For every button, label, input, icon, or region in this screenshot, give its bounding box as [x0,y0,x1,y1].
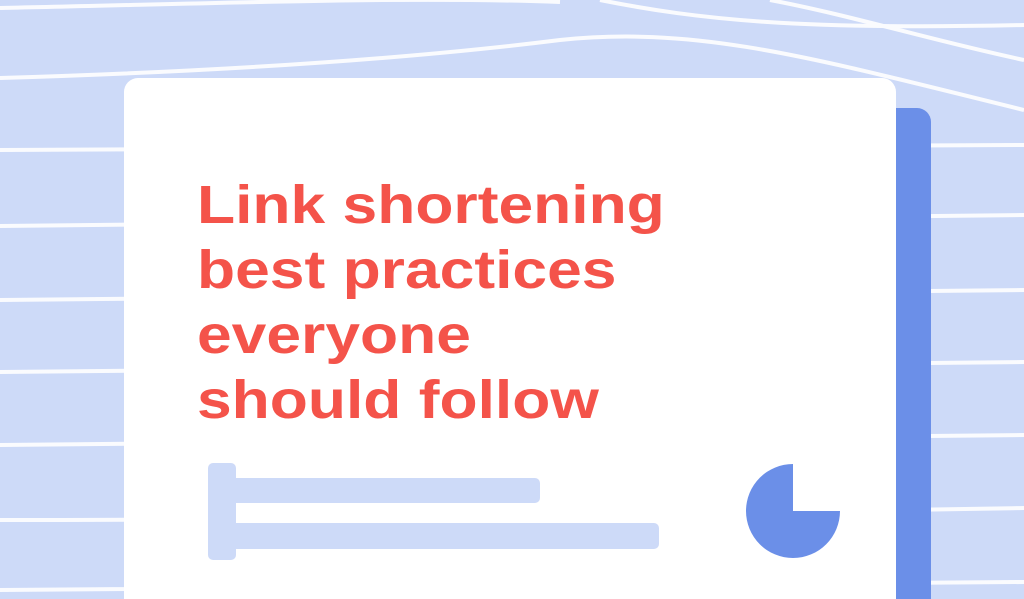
bar chart [208,463,659,560]
back card [870,108,931,599]
title: best practices [197,240,616,300]
title: should follow [197,370,599,430]
main card [124,78,896,599]
title: everyone [197,305,471,365]
title [197,175,665,430]
icon: pie chart [746,464,840,558]
title: Link shortening [197,175,665,235]
